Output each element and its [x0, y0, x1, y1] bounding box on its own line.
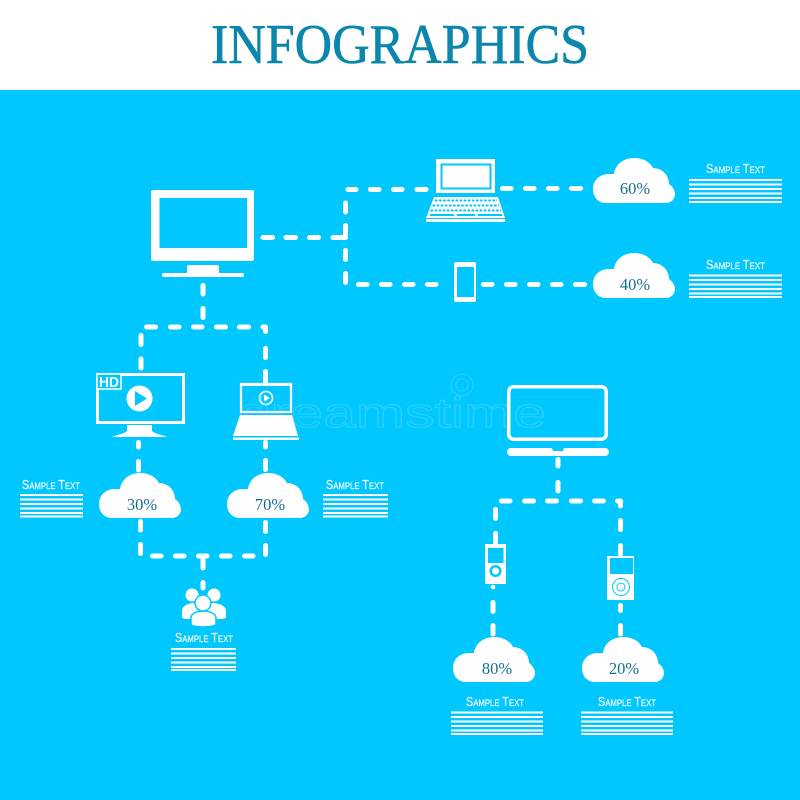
text block: 70% sample: [323, 478, 388, 516]
icon: small music player: [485, 544, 506, 584]
icon: large music player: [607, 556, 634, 600]
icon: HD monitor: HD: [99, 375, 119, 391]
cloud: 40%: 40%: [620, 275, 650, 294]
cloud: 60%: [593, 158, 675, 203]
icon: smartphone: [454, 262, 476, 302]
text block: 20% sample: [581, 695, 673, 734]
cloud: 80%: 80%: [482, 659, 512, 678]
text block: 80% sample: Sample Text: [466, 695, 524, 709]
cloud: 20%: 20%: [609, 659, 639, 678]
icon: laptop with keyboard: [426, 159, 505, 222]
text block: 80% sample: [451, 695, 543, 734]
cloud: 60%: 60%: [620, 179, 650, 198]
cloud: 40%: [593, 253, 675, 298]
text block: 30% sample: Sample Text: [22, 478, 80, 492]
cloud: 30%: [99, 473, 181, 518]
text block: 30% sample: [20, 478, 83, 516]
cloud: 30%: 30%: [127, 495, 157, 514]
connector dot: [491, 585, 495, 589]
text block: 70% sample: Sample Text: [326, 478, 384, 492]
text block: 60% sample: Sample Text: [706, 162, 765, 176]
text block: 20% sample: Sample Text: [598, 695, 656, 709]
dashed connectors: [138, 188, 620, 634]
text block: 60% sample: [689, 162, 782, 202]
icon: main monitor: [151, 190, 254, 277]
text block: people sample: Sample Text: [175, 631, 233, 645]
text block: 40% sample: [689, 258, 782, 297]
icon: flat laptop: [507, 387, 609, 456]
title: INFOGRAPHICS: [211, 14, 589, 76]
text block: 40% sample: Sample Text: [706, 258, 765, 272]
cloud: 20%: [582, 637, 664, 682]
cloud: 70%: [227, 473, 309, 518]
icon: HD monitor: [97, 374, 184, 437]
cloud: 80%: [453, 637, 535, 682]
text block: people sample: [171, 631, 236, 670]
cloud: 70%: 70%: [255, 495, 285, 514]
watermark: dreamstime: [238, 389, 546, 436]
icon: laptop with play button: [233, 383, 299, 440]
icon: people group: [182, 588, 226, 627]
watermark: [238, 374, 546, 436]
